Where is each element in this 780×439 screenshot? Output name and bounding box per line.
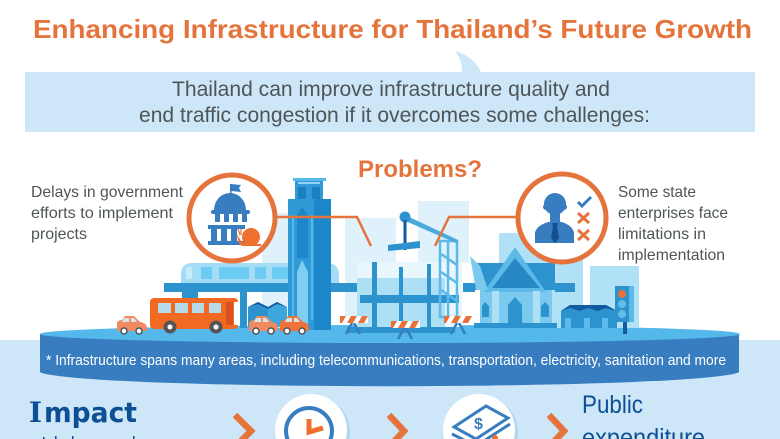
money icon: $	[474, 416, 483, 433]
arrow 1	[235, 415, 251, 439]
text: delays in government: Delays in government	[31, 184, 184, 201]
connector lines	[277, 217, 516, 246]
speech bubble intro: end traffic congestion if it overcomes some challenges:	[139, 104, 650, 127]
text: state enterprises: enterprises face	[618, 205, 728, 222]
pale background buildings	[262, 201, 469, 328]
tower	[288, 178, 331, 330]
public expenditure text: Public	[582, 391, 643, 419]
houses left	[248, 302, 287, 327]
disc platform: * Infrastructure spans many areas, including telecommunications, transportation, electricity, sanitation and more	[46, 352, 726, 369]
clock icon	[275, 394, 350, 439]
car 3	[280, 316, 309, 334]
construction site	[347, 262, 462, 333]
arrow 2	[389, 415, 404, 439]
circle: limitations icon	[518, 174, 606, 262]
text: state enterprises: Some state	[618, 184, 696, 201]
mid background buildings	[499, 233, 639, 328]
cityscape	[117, 178, 639, 339]
speech bubble intro	[25, 51, 755, 132]
text: state enterprises: limitations in	[618, 226, 706, 243]
money icon	[443, 394, 518, 439]
text: delays in government: efforts to implement	[31, 205, 174, 222]
bus	[150, 298, 238, 334]
icon: government building	[208, 184, 250, 245]
text: state enterprises	[618, 184, 728, 264]
crane	[388, 212, 458, 317]
public expenditure text	[582, 391, 705, 439]
car 2	[249, 316, 278, 334]
text: delays in government	[31, 184, 184, 243]
impact heading: mpact	[44, 396, 137, 429]
title: Enhancing Infrastructure for Thailand’s Future Growth	[33, 14, 752, 44]
arrow 3	[549, 415, 564, 439]
road barriers	[340, 316, 473, 339]
icon: business person	[535, 193, 574, 243]
monorail train	[181, 263, 339, 283]
houses right	[561, 305, 617, 328]
text: state enterprises: implementation	[618, 247, 725, 264]
impact heading: I	[29, 396, 42, 429]
car 1	[117, 316, 147, 334]
speech bubble intro: Thailand can improve infrastructure quality and	[172, 78, 610, 101]
clipped text fragments below impact	[43, 436, 134, 439]
elevated track	[164, 283, 575, 328]
disc platform	[40, 325, 740, 386]
icon: snail	[237, 228, 261, 246]
text: delays in government: projects	[31, 226, 87, 243]
icon: check and crosses	[578, 197, 591, 240]
circle: government delays icon	[189, 175, 275, 261]
heading: problems: Problems?	[358, 156, 482, 183]
traffic light	[615, 286, 634, 334]
temple	[470, 247, 562, 328]
